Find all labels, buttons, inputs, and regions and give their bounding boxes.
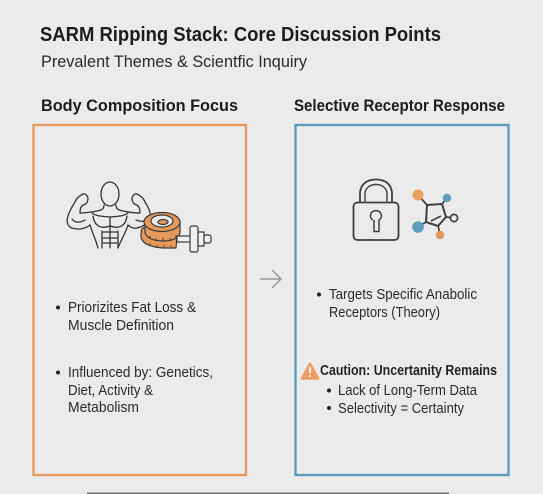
bullet: influences: Metabolism xyxy=(68,400,139,416)
caution heading: Caution: Uncertanity Remains xyxy=(320,363,497,379)
caution list xyxy=(327,383,477,417)
icon: padlock xyxy=(354,180,398,240)
bullet: influences: Influenced by: Genetics, xyxy=(68,365,213,381)
bullet: fat loss: Muscle Definition xyxy=(68,318,174,334)
subtitle: Prevalent Themes & Scientfic Inquiry xyxy=(41,53,308,71)
bullet: influences xyxy=(56,365,213,416)
panel: selective receptor xyxy=(296,125,508,475)
caution list: Selectivity = Certainty xyxy=(338,401,465,417)
heading: body composition: Body Composition Focus xyxy=(41,96,238,115)
heading: selective receptor: Selective Receptor Response xyxy=(294,96,505,115)
icon: muscular torso xyxy=(67,182,150,248)
icon: warning triangle xyxy=(301,363,319,379)
panel: body composition xyxy=(34,125,246,475)
bullet: fat loss: Priorizites Fat Loss & xyxy=(68,300,196,316)
bullet: anabolic receptors xyxy=(317,287,477,321)
icon: dumbbell xyxy=(177,226,211,252)
bullet: anabolic receptors: Targets Specific Anabolic xyxy=(329,287,477,303)
caution list: Lack of Long-Term Data xyxy=(338,383,477,399)
icon: molecule xyxy=(412,190,458,239)
arrow xyxy=(260,270,281,288)
bullet: fat loss xyxy=(56,300,196,334)
bullet: influences: Diet, Activity & xyxy=(68,383,153,399)
icon: measuring tape xyxy=(141,212,180,248)
bullet: anabolic receptors: Receptors (Theory) xyxy=(329,305,440,321)
title: SARM Ripping Stack: Core Discussion Points xyxy=(40,23,441,46)
